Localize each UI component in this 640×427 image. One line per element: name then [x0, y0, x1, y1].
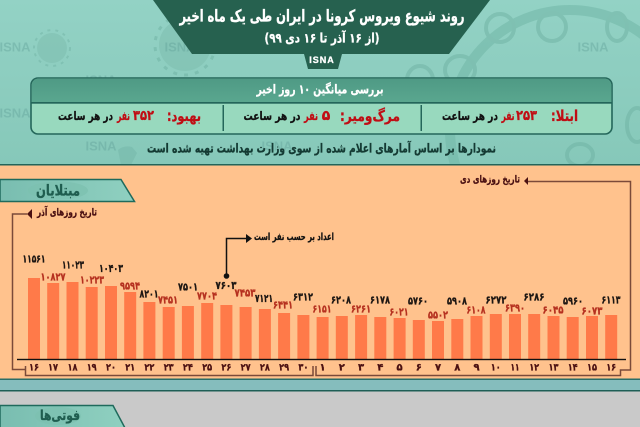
source note: نمودارها بر اساس آمارهای اعلام شده از سوی وزارت بهداشت تهیه شده است [147, 140, 496, 156]
section tab: deaths: فوتی‌ها [40, 408, 80, 424]
title: main line: روند شیوع ویروس کرونا در ایران طی یک ماه اخیر [179, 6, 465, 26]
date axis labels [29, 362, 616, 374]
date axis labels: ۱۱ [510, 362, 520, 374]
value labels: ۶۳۱۲ [293, 290, 313, 304]
date axis labels: ۱۶ [606, 362, 616, 374]
date axis labels: ۲ [339, 362, 345, 374]
date axis labels: ۸ [454, 362, 460, 374]
value labels: ۵۷۶۰ [408, 294, 428, 308]
axis line [17, 359, 626, 360]
value labels: ۶۲۰۸ [331, 294, 351, 306]
value labels: ۶۱۰۸ [466, 304, 486, 316]
stat: infections: در هر ساعت [442, 109, 498, 123]
date axis labels: ۲۸ [260, 362, 270, 374]
stat: deaths: نفر [303, 109, 318, 123]
value labels [22, 252, 621, 322]
date axis labels: ۱۶ [29, 362, 39, 374]
date axis labels: ۱۹ [87, 362, 97, 374]
value labels: ۵۹۰۸ [447, 294, 467, 308]
stat: recoveries: ۳۵۲ [133, 108, 154, 124]
date axis labels: ۲۹ [279, 362, 289, 374]
date axis labels: ۱۴ [568, 362, 578, 374]
header background with virus watermark: ISNA [85, 138, 117, 154]
date axis labels: ۷ [435, 362, 441, 374]
value labels: ۷۵۰۱ [178, 280, 198, 294]
value labels: ۱۱۰۲۳ [62, 258, 84, 272]
header background with virus watermark: ISNA [85, 72, 117, 88]
value labels: ۶۱۷۸ [370, 294, 390, 306]
stat: recoveries: بهبود: [167, 107, 201, 125]
value labels: ۶۱۱۳ [602, 294, 621, 306]
ISNA tag: ISNA [309, 55, 335, 65]
value labels: ۶۲۶۱ [351, 302, 371, 316]
value labels: ۵۵۰۲ [428, 308, 448, 322]
stat: deaths: مرگ‌ومیر: [340, 107, 400, 125]
value labels: ۶۲۸۶ [524, 290, 544, 304]
value labels: ۱۰۸۲۷ [40, 270, 66, 284]
value labels: ۶۴۴۱ [273, 298, 293, 312]
header background with virus watermark: ISNA [164, 40, 196, 54]
value labels: ۷۱۲۱ [255, 292, 273, 305]
date axis labels: ۲۵ [202, 362, 212, 374]
stat: infections: نفر [501, 109, 514, 123]
date axis labels: ۱۸ [68, 362, 78, 374]
date axis labels: ۲۶ [221, 362, 231, 374]
stat: infections [442, 107, 578, 125]
date axis labels: ۱۷ [48, 362, 58, 374]
date axis labels: ۲۱ [125, 362, 135, 374]
header background with virus watermark: ISNA [0, 106, 31, 120]
stat: recoveries: نفر [116, 109, 130, 123]
value labels: ۱۰۴۰۳ [99, 262, 123, 275]
value labels: ۷۴۵۱ [158, 294, 178, 306]
panel: infected chart [0, 166, 640, 378]
value labels: ۶۳۹۰ [505, 302, 525, 314]
panel: deaths section [0, 392, 640, 427]
date axis labels: ۱ [320, 362, 326, 374]
section tab: deaths [0, 406, 125, 427]
stat: infections: ابتلا: [551, 107, 578, 125]
value labels: ۸۲۰۱ [140, 288, 158, 300]
value labels: ۷۶۰۳ [216, 279, 237, 292]
header background with virus watermark: ISNA [261, 138, 293, 154]
value labels: ۶۱۵۱ [312, 302, 332, 316]
teal separator band [0, 378, 640, 392]
callout: figures are in persons [224, 232, 334, 279]
date axis labels: ۴ [377, 362, 383, 374]
value labels: ۶۰۲۱ [390, 306, 408, 318]
section tab: infected [0, 180, 134, 202]
header background with virus watermark: ISNA [0, 40, 31, 54]
date axis labels: ۶ [416, 362, 422, 374]
stat: deaths [244, 107, 400, 125]
date axis labels: ۱۲ [529, 362, 539, 374]
stat: infections: ۲۵۳ [516, 108, 537, 124]
value labels: ۶۰۷۳ [582, 304, 603, 318]
value labels: ۶۲۷۲ [486, 294, 507, 306]
stat: recoveries: در هر ساعت [58, 109, 113, 123]
bracket: Azar dates: تاریخ روزهای دی [460, 174, 520, 186]
value labels: ۱۰۲۲۳ [80, 274, 104, 286]
title banner [153, 0, 490, 54]
value labels: ۷۴۵۳ [234, 286, 256, 300]
bracket: Azar dates: تاریخ روزهای آذر [36, 206, 97, 218]
stat: deaths: ۵ [322, 108, 331, 124]
stat: deaths: در هر ساعت [244, 109, 300, 123]
date axis labels: ۱۳ [548, 362, 558, 374]
panel heading: بررسی میانگین ۱۰ روز اخیر [256, 82, 384, 96]
value labels: ۵۹۶۰ [563, 294, 583, 308]
panel: ten day average [31, 78, 612, 134]
value labels: ۱۱۵۶۱ [22, 252, 46, 266]
callout: figures are in persons: اعداد بر حسب نفر است [254, 232, 334, 243]
title: date range: (از ۱۶ آذر تا ۱۶ دی ۹۹) [264, 30, 380, 46]
stat: recoveries [58, 107, 201, 125]
date axis labels: ۲۲ [144, 362, 154, 374]
date axis labels: ۲۴ [183, 362, 193, 374]
header background with virus watermark [0, 0, 640, 250]
date axis labels: ۳۰ [298, 362, 308, 374]
date axis labels: ۲۳ [164, 362, 174, 374]
date axis labels: ۱۰ [491, 362, 501, 374]
value labels: ۷۷۰۴ [197, 290, 217, 302]
value labels: ۶۰۴۵ [542, 304, 564, 316]
date axis labels: ۱۵ [587, 362, 597, 374]
ISNA tag [304, 54, 342, 69]
section tab: infected: مبتلایان [36, 182, 80, 200]
header background with virus watermark: ISNA [577, 40, 609, 54]
date axis labels: ۵ [397, 362, 403, 374]
bracket: Azar dates [12, 174, 630, 376]
date axis labels: ۹ [473, 362, 480, 374]
bar chart [28, 278, 617, 359]
value labels: ۹۵۹۴ [120, 280, 140, 292]
date axis labels: ۲۷ [241, 362, 251, 374]
date axis labels: ۳ [358, 362, 364, 374]
date axis labels: ۲۰ [106, 362, 116, 374]
